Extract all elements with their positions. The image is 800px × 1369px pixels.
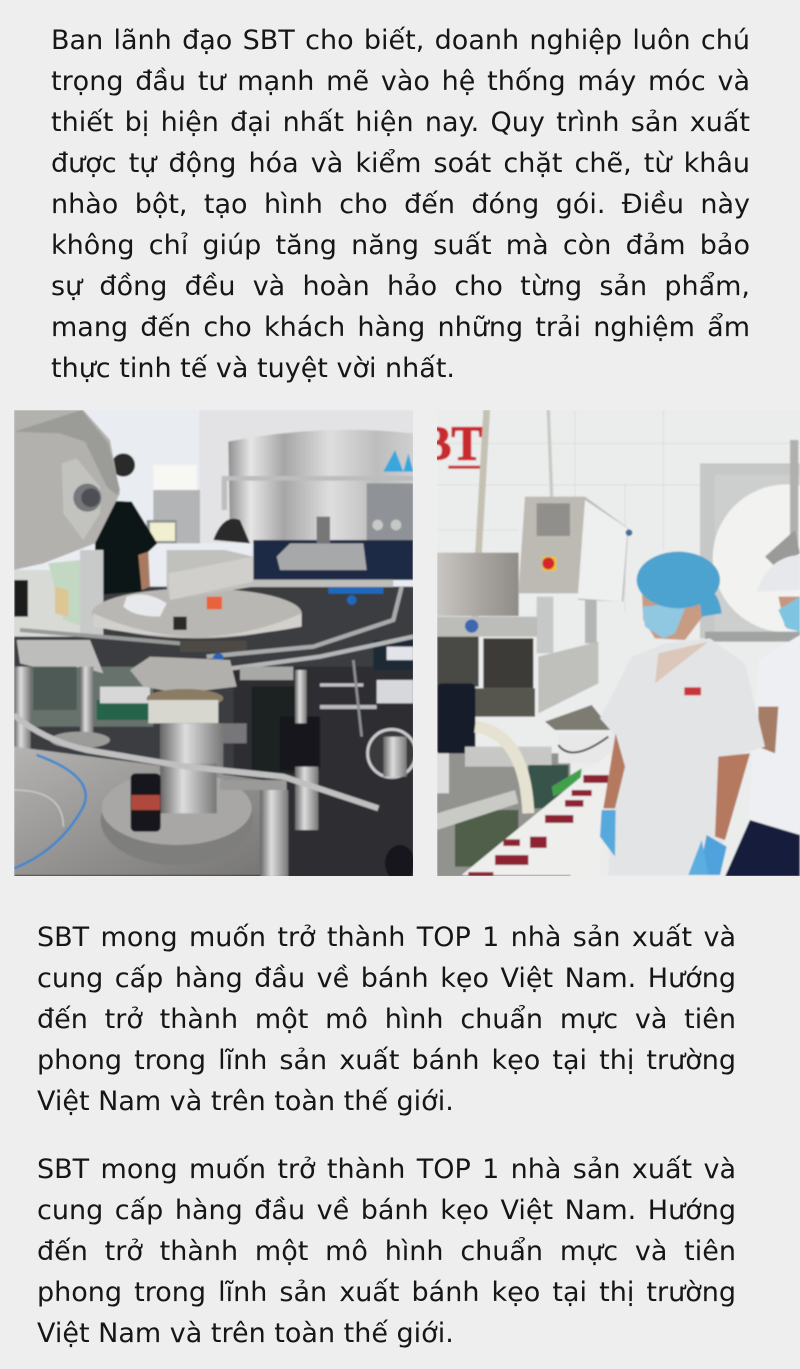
text block: vision paragraph: [37, 922, 736, 1117]
text block: repeated vision paragraph: [37, 1154, 736, 1349]
text block: intro paragraph: trọng đầu tư mạnh mẽ vào hệ thống máy móc và: [51, 66, 750, 97]
text block: intro paragraph: nhào bột, tạo hình cho đến đóng gói. Điều này: [51, 189, 750, 220]
text block: vision paragraph: SBT mong muốn trở thành TOP 1 nhà sản xuất và: [37, 922, 736, 953]
text block: repeated vision paragraph: Việt Nam và trên toàn thế giới.: [37, 1318, 454, 1349]
text block: vision paragraph: Việt Nam và trên toàn thế giới.: [37, 1086, 454, 1117]
text block: vision paragraph: cung cấp hàng đầu về bánh kẹo Việt Nam. Hướng: [37, 963, 736, 994]
text block: intro paragraph: thiết bị hiện đại nhất hiện nay. Quy trình sản xuất: [51, 107, 750, 138]
text block: intro paragraph: thực tinh tế và tuyệt vời nhất.: [51, 353, 455, 384]
text block: repeated vision paragraph: cung cấp hàng đầu về bánh kẹo Việt Nam. Hướng: [37, 1195, 736, 1226]
text block: repeated vision paragraph: phong trong lĩnh sản xuất bánh kẹo tại thị trường: [37, 1277, 736, 1308]
text block: intro paragraph: không chỉ giúp tăng năng suất mà còn đảm bảo: [51, 230, 750, 261]
text block: repeated vision paragraph: SBT mong muốn trở thành TOP 1 nhà sản xuất và: [37, 1154, 736, 1185]
text block: intro paragraph: Ban lãnh đạo SBT cho biết, doanh nghiệp luôn chú: [51, 25, 750, 56]
text block: intro paragraph: mang đến cho khách hàng những trải nghiệm ẩm: [51, 312, 750, 343]
photo: packaging machine: [14, 410, 413, 876]
text block: intro paragraph: [51, 25, 750, 384]
text block: intro paragraph: được tự động hóa và kiểm soát chặt chẽ, từ khâu: [51, 148, 750, 179]
text block: vision paragraph: đến trở thành một mô hình chuẩn mực và tiên: [37, 1004, 736, 1035]
text block: repeated vision paragraph: đến trở thành một mô hình chuẩn mực và tiên: [37, 1236, 736, 1267]
text block: intro paragraph: sự đồng đều và hoàn hảo cho từng sản phẩm,: [51, 271, 750, 302]
photo: workers at production line: [437, 410, 800, 876]
text block: vision paragraph: phong trong lĩnh sản xuất bánh kẹo tại thị trường: [37, 1045, 736, 1076]
